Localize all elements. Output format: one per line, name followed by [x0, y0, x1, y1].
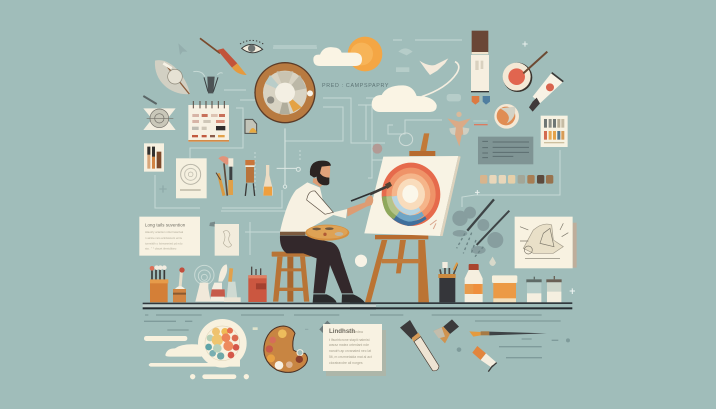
icon: eye: [240, 40, 263, 53]
card heading: Lindhsth: [329, 328, 355, 335]
shirt: [280, 182, 347, 232]
arm fold: [307, 191, 333, 214]
dark brush cup: [438, 262, 457, 302]
icon: sun: [348, 37, 382, 71]
shelf line bottom: [143, 307, 376, 309]
faint lines under shelf: [144, 315, 339, 330]
card body: [329, 330, 372, 365]
stool: [272, 252, 311, 302]
card body: sta . " * ulacet tlerstdtlaro: [145, 247, 177, 251]
belt: [280, 232, 305, 235]
node dots: [277, 128, 300, 188]
icon: big cloud: [372, 85, 437, 112]
card body: 5lt, m crsrrnetaida mat al act: [329, 355, 372, 359]
card body: naruirh ap crvanated nec lat: [329, 349, 371, 353]
card body: waraz matez ortenlant nde: [329, 343, 369, 347]
row of color beads: [480, 175, 553, 184]
shoes: [313, 294, 337, 303]
icon: bottle: [263, 165, 273, 196]
jar with brush: [173, 267, 186, 302]
trousers: [280, 236, 353, 293]
canvas with color wheel: [364, 156, 461, 236]
card heading: Long tails suvention: [145, 223, 186, 228]
faint oval: [399, 133, 413, 146]
icon: faint triangle: [178, 43, 187, 55]
card face: [323, 324, 382, 371]
upper-left icons: [143, 38, 317, 198]
line: [224, 46, 317, 90]
orange jar: [492, 275, 517, 302]
brush white: [218, 264, 227, 282]
card: spiral sketch: [176, 158, 207, 198]
icon: paint tube angled: [529, 73, 563, 112]
smudges and pencils: [452, 199, 509, 257]
faint rules: [370, 315, 569, 358]
hair and beard: [310, 161, 331, 185]
palette in lap: [305, 225, 349, 241]
connector lines: [155, 40, 560, 255]
small jars: [526, 276, 562, 302]
icon: lamp: [193, 71, 223, 93]
brush: [351, 189, 382, 201]
icon: small cloud: [313, 47, 362, 66]
text card: [139, 217, 200, 256]
panel: lower text card: [323, 324, 386, 376]
icon: small droplet: [489, 257, 496, 266]
sparkle: [570, 288, 575, 294]
neck: [313, 178, 323, 187]
card shadow: [326, 330, 386, 376]
shelf end lower: [350, 307, 572, 309]
white dot: [355, 255, 367, 267]
bottles group: [195, 264, 241, 302]
card: color swatches: [541, 116, 568, 147]
icon: paintbrush: [200, 38, 247, 75]
icon: upright brushes: [216, 156, 233, 196]
panel: grey text box: [478, 137, 533, 164]
bottle cream: [195, 283, 211, 302]
upper-right icons: [313, 31, 568, 195]
sketch card: [515, 217, 577, 268]
icon: curved bird ornament: [419, 58, 459, 97]
white bottle: [465, 264, 483, 302]
icon: mixing bowl: [494, 104, 519, 129]
icon: angel figure: [447, 112, 471, 147]
small plus: [159, 185, 167, 193]
short flat brush: [433, 319, 459, 343]
icon: paint tube tall: [471, 31, 490, 105]
small lines: [473, 119, 488, 123]
card body: Hlaoirly artartion rdist hatarival: [145, 230, 184, 234]
lower-right objects: [350, 199, 577, 372]
shelf end: [350, 302, 572, 304]
shelf band: [143, 304, 376, 307]
head: [319, 165, 330, 181]
lower-left objects: [139, 217, 376, 379]
brush orange: [230, 268, 231, 282]
bottle base: [224, 297, 241, 302]
artist: [280, 161, 392, 303]
icon: leaf sketch: [155, 60, 190, 94]
shelf line top: [143, 303, 376, 304]
artist and easel: [272, 133, 461, 303]
card body: n aicine rato artrdsistont ernis: [145, 236, 183, 240]
calendar: [188, 101, 229, 142]
icon: small easel stool: [245, 160, 255, 196]
easel: [365, 133, 435, 302]
bottle blue: [227, 282, 237, 298]
bottle band: [211, 289, 225, 297]
card body: t Ifscrirtcrone stapit natmist: [329, 338, 370, 342]
small line red: [474, 123, 488, 127]
icon: wall sketch note: [209, 222, 239, 256]
card: tall swatch: [144, 143, 164, 172]
card body: tunrsiidh o Istrnaneted pd ndo: [145, 241, 183, 245]
wooden palette: [264, 326, 307, 372]
long thin brush: [469, 331, 547, 337]
bottle red: [210, 283, 225, 302]
wind and cloud shapes: [144, 327, 258, 379]
icon: small document: [245, 119, 257, 133]
white dot: [355, 255, 367, 267]
icon: paint dish: [503, 52, 547, 92]
card body: [145, 230, 184, 251]
cup of brushes: [150, 265, 168, 302]
faint mark: [305, 328, 308, 331]
color wheel: [254, 62, 316, 123]
large flat brush: [400, 320, 439, 371]
card body: vs hnedsw: [347, 330, 364, 334]
faint shield: [372, 144, 382, 154]
paint tube small: [472, 346, 497, 372]
forearm and hand: [347, 196, 373, 217]
red pencil cup: [248, 267, 267, 302]
faint ornaments: [396, 48, 461, 101]
card body: cloratravdre all norges: [329, 361, 363, 365]
sparkles: [475, 41, 528, 195]
icon: x-shaped diagram: [143, 96, 176, 130]
tape: [319, 321, 331, 333]
shoe right: [342, 294, 365, 303]
caption: PRED : CAMPSPAPRY: [322, 83, 389, 89]
bottle liquid: [263, 187, 272, 196]
swirl ornament: [195, 265, 214, 285]
color wheel dish: [198, 319, 247, 368]
